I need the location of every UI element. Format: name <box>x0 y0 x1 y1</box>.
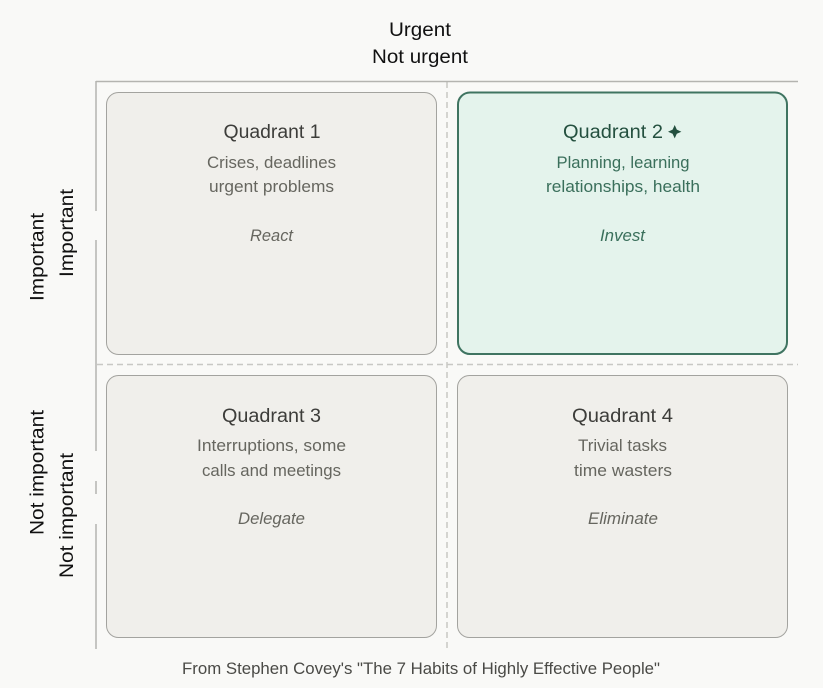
panel: quadrant 4: Trivial tasks <box>578 436 667 455</box>
left axis labels: important: Important <box>26 212 48 301</box>
panel: quadrant 2 highlighted: relationships, health <box>546 177 700 196</box>
panel: quadrant 4 <box>458 376 788 638</box>
top axis labels <box>372 19 469 68</box>
left axis labels: not important <box>26 409 78 578</box>
panel: quadrant 3: Quadrant 3 <box>222 406 321 427</box>
panel: quadrant 3: Interruptions, some <box>197 436 346 455</box>
icon: sparkle <box>668 125 681 138</box>
top axis line <box>96 80 798 82</box>
panel: quadrant 1 <box>106 92 436 354</box>
panel: quadrant 3 <box>106 376 436 638</box>
panel: quadrant 4: time wasters <box>574 461 672 480</box>
panel: quadrant 3: Delegate <box>238 509 305 528</box>
left axis line <box>95 81 97 649</box>
panel: quadrant 4: Eliminate <box>588 509 658 528</box>
top axis labels: Not urgent <box>372 46 469 68</box>
panel: quadrant 4: Quadrant 4 <box>572 406 673 427</box>
panel: quadrant 2 highlighted: Planning, learning <box>556 153 690 172</box>
panel: quadrant 2 highlighted: Quadrant 2 <box>563 122 663 143</box>
panel: quadrant 3: calls and meetings <box>202 461 341 480</box>
top axis labels: Urgent <box>389 19 452 41</box>
panel: quadrant 2 highlighted <box>458 92 787 354</box>
left axis labels: important: Important <box>56 188 78 277</box>
panel: quadrant 2 highlighted: Invest <box>600 226 646 245</box>
left axis labels: important <box>26 188 78 301</box>
left axis labels: not important: Not important <box>26 409 48 535</box>
panel: quadrant 1: React <box>250 226 294 245</box>
panel: quadrant 1: Crises, deadlines <box>207 153 336 172</box>
left axis labels: not important: Not important <box>56 452 78 578</box>
panel: quadrant 1: Quadrant 1 <box>224 122 320 143</box>
panel: quadrant 1: urgent problems <box>209 177 334 196</box>
source caption: From Stephen Covey's "The 7 Habits of Highly Effective People" <box>182 659 660 678</box>
